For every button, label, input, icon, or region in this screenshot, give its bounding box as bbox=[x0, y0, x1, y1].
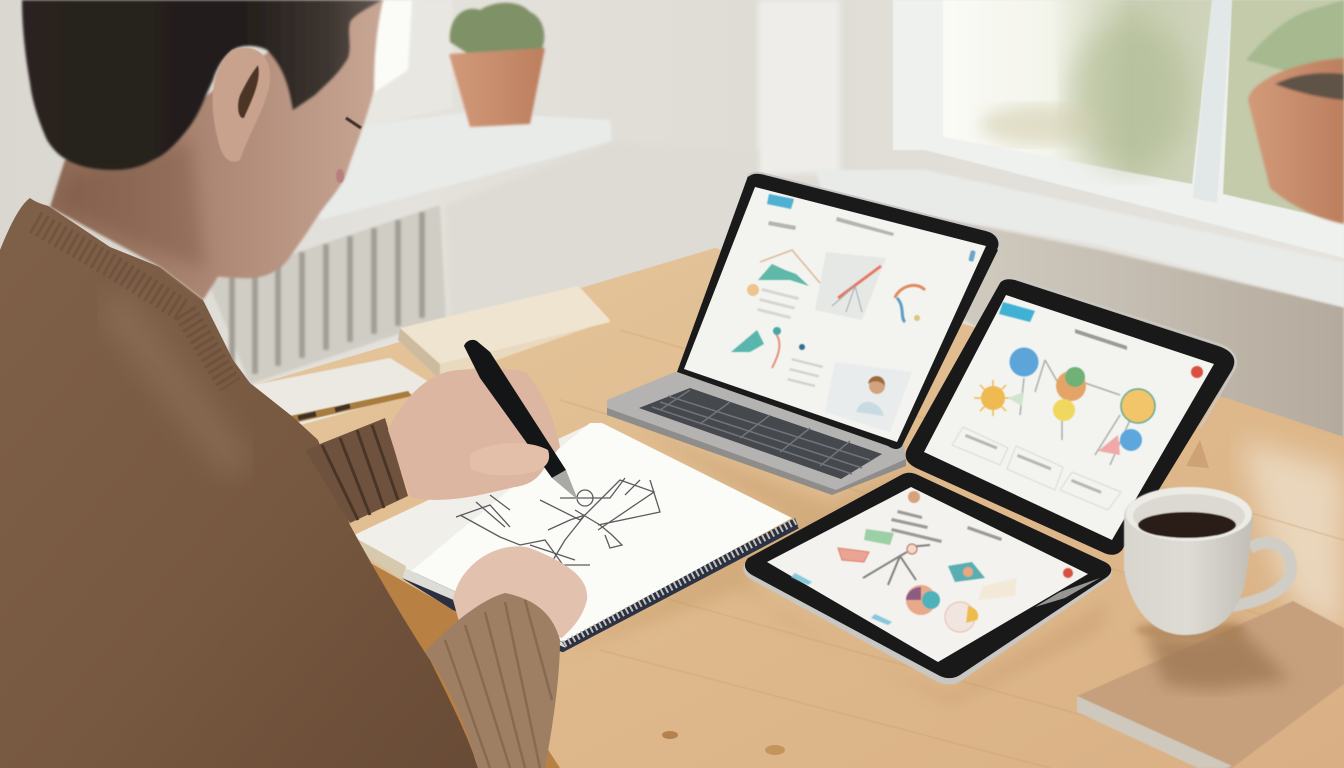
page shadow bbox=[352, 536, 406, 580]
green and orange node bbox=[1056, 367, 1086, 401]
stick figure bbox=[863, 545, 930, 585]
mug bbox=[1124, 487, 1291, 638]
flat tablet screen bbox=[767, 487, 1088, 662]
lower wall under left sill bbox=[445, 142, 758, 320]
circular diagram bbox=[895, 285, 925, 322]
blue circle bbox=[1010, 348, 1038, 376]
teal icon bbox=[948, 562, 985, 582]
upper sleeve bbox=[305, 418, 408, 523]
line chart panel bbox=[815, 252, 886, 320]
mug shadow bbox=[1135, 622, 1245, 638]
glare bbox=[1035, 578, 1100, 607]
caption boxes bbox=[952, 427, 1121, 510]
blue labels bbox=[791, 573, 812, 585]
thumb over pen bbox=[470, 443, 549, 475]
ear bbox=[213, 48, 270, 162]
second chart bbox=[731, 327, 781, 368]
person bbox=[0, 0, 587, 768]
tablet badge bbox=[999, 302, 1035, 322]
sweater body bbox=[0, 198, 478, 768]
sticky card bbox=[978, 578, 1017, 600]
heading text block bbox=[891, 510, 1002, 543]
red dot bbox=[1063, 568, 1073, 578]
shadow under devices bbox=[560, 420, 1110, 705]
network diagram lines bbox=[1020, 360, 1130, 465]
window glass left pane bbox=[943, 0, 1212, 184]
right potted plant bbox=[1246, 0, 1344, 224]
coffee bbox=[1138, 512, 1236, 538]
pencil sketch bbox=[456, 478, 660, 565]
mullion bbox=[1193, 0, 1232, 203]
paper on desk bbox=[253, 358, 437, 427]
laptop lid bbox=[677, 173, 1000, 449]
left potted plant bbox=[449, 3, 545, 127]
screen badge bbox=[767, 194, 794, 209]
flat tablet bbox=[743, 473, 1112, 684]
cover bbox=[352, 518, 798, 652]
laptop screen bbox=[684, 187, 986, 442]
screen heading bbox=[768, 217, 894, 236]
keyboard bbox=[639, 388, 882, 479]
tablet screen bbox=[924, 295, 1214, 540]
small icon block bbox=[747, 284, 759, 296]
laptop bbox=[607, 173, 1000, 495]
spiral binding bbox=[564, 521, 796, 644]
right window sill bbox=[815, 170, 1344, 307]
pink triangle bbox=[1098, 435, 1120, 455]
pen bbox=[464, 340, 578, 500]
screen contents bbox=[952, 302, 1203, 510]
book on desk bbox=[398, 286, 610, 380]
notebook bbox=[352, 423, 798, 652]
pale light patch on the desk bbox=[1240, 440, 1344, 640]
portrait panel bbox=[825, 362, 912, 432]
pie chart yellow bbox=[945, 602, 978, 632]
shoulder highlight bbox=[110, 300, 240, 470]
hair bbox=[22, 0, 383, 170]
green triangle bbox=[1008, 392, 1024, 406]
mini chart bbox=[758, 250, 820, 286]
mug handle bbox=[1232, 543, 1291, 606]
laptop base bbox=[607, 372, 906, 493]
yellow sun bbox=[974, 380, 1012, 416]
yellow node bbox=[1053, 399, 1075, 421]
wall column by the window bbox=[758, 0, 840, 175]
tablet heading bbox=[1075, 329, 1127, 350]
ribbed collar bbox=[35, 222, 230, 385]
eye and lips bbox=[336, 118, 361, 183]
large yellow circle bbox=[1121, 389, 1155, 423]
right window bbox=[893, 0, 1344, 258]
lower hand bbox=[453, 546, 587, 638]
right page bbox=[405, 423, 792, 642]
right wall below sill bbox=[825, 195, 1344, 440]
desk front edge bbox=[358, 556, 560, 768]
red button bbox=[1191, 366, 1203, 378]
pencil bbox=[290, 391, 412, 423]
lower sleeve bbox=[425, 593, 560, 768]
left window bbox=[355, 0, 452, 128]
mug body bbox=[1124, 487, 1253, 635]
screen contents bbox=[731, 194, 976, 432]
green card bbox=[864, 529, 894, 545]
upright tablet bbox=[906, 277, 1236, 555]
small closed notebook bbox=[1077, 601, 1344, 768]
skin of face and neck bbox=[50, 0, 383, 300]
red card bbox=[838, 548, 869, 562]
desk top bbox=[255, 248, 1344, 768]
window glass right pane bbox=[1223, 0, 1344, 222]
left page bbox=[352, 424, 640, 575]
small blue circle bbox=[1120, 429, 1142, 451]
left window sill bbox=[318, 112, 612, 220]
blue side icon bbox=[968, 250, 976, 262]
radiator bbox=[208, 205, 446, 384]
writing hand bbox=[388, 369, 560, 500]
window frame bbox=[893, 0, 1344, 258]
neck shadow bbox=[60, 140, 205, 270]
mug shadow on notebook bbox=[1143, 620, 1290, 690]
screen contents bbox=[791, 491, 1073, 632]
pie chart purple bbox=[906, 585, 940, 615]
tablet stand bbox=[1186, 440, 1209, 468]
